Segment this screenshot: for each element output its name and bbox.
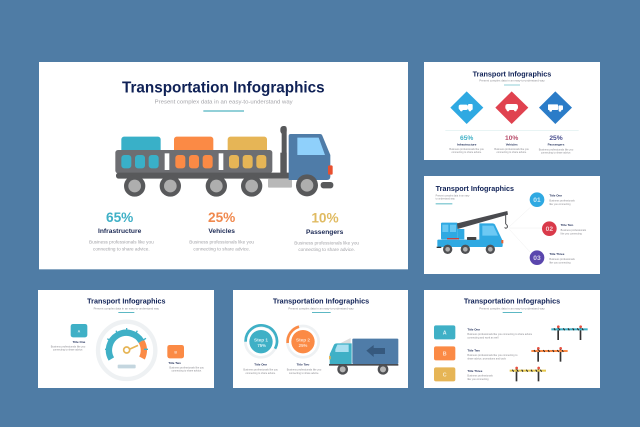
icon: blue diamond mixer truck: [450, 91, 483, 124]
stat labels: Infrastructure: [457, 142, 477, 146]
chart: step 1 ring: [245, 325, 277, 357]
callout: title two: connecting to share advice.: [172, 370, 202, 373]
item A: [434, 325, 533, 339]
stat labels: Business professionals like you: [539, 148, 574, 151]
icon: yellow barrier: [510, 367, 546, 381]
item C: C: [443, 372, 447, 378]
stat: passengers: Passengers: [306, 229, 344, 236]
heading: Transport Infographics: [436, 184, 514, 193]
chart: step 2 ring: [287, 326, 319, 357]
item B: Business professionals like you connecting to: [467, 354, 518, 357]
item C: Title Three: [467, 369, 483, 373]
panel: steps and delivery truck slide: Present complex data in an easy-to-understand way: [288, 307, 355, 310]
stat labels: 10%: [505, 135, 518, 142]
panel: steps and delivery truck slide: [233, 290, 408, 388]
panel: crane truck slide: to understand way: [436, 197, 456, 200]
item 01: Title One: [549, 194, 562, 198]
icon: teal barrier: [551, 325, 588, 340]
item 03: 03: [533, 255, 541, 262]
stat labels: Passengers: [548, 142, 565, 146]
item 01: Business professionals: [549, 200, 575, 203]
item A: Business professionals like you connecting to share advice: [467, 333, 533, 336]
item 02: like you connecting: [561, 232, 582, 235]
callout: title one: [51, 324, 87, 352]
callout: title one: Business professionals like you: [51, 346, 86, 349]
stat: passengers: [294, 211, 359, 252]
icon: delivery truck: [329, 338, 398, 375]
item A: Title One: [467, 327, 480, 331]
stat labels: Business professionals like you: [494, 148, 530, 151]
heading: Transport Infographics: [87, 297, 165, 306]
item C: like you connecting: [467, 378, 489, 381]
stat: passengers: Business professionals like you: [294, 240, 359, 245]
item 03: Business professionals: [549, 258, 575, 261]
item 03: like you connecting: [549, 261, 571, 264]
item labels: Title One: [254, 363, 267, 367]
item labels: connecting to share advice.: [246, 372, 276, 375]
callout: title two: Business professionals like you: [169, 367, 205, 370]
item A: A: [443, 330, 447, 336]
stat: passengers: 10%: [311, 211, 339, 226]
heading: Transportation Infographics: [273, 297, 369, 306]
stat: infrastructure: connecting to share advice.: [93, 246, 150, 251]
item 02: [542, 221, 587, 236]
callout: title one: Title One: [73, 340, 86, 344]
chart: step 2 ring: Step 2: [296, 337, 310, 342]
stat: infrastructure: Business professionals like you: [89, 239, 154, 244]
stat: vehicles: 25%: [208, 210, 235, 225]
item B: share advice, promotions and tools: [467, 357, 507, 360]
item 03: [530, 250, 575, 265]
stat labels: connecting to share advice.: [541, 151, 571, 154]
item B: B: [443, 351, 447, 357]
callout: title two: Title Two: [168, 361, 181, 365]
stat: infrastructure: 65%: [106, 210, 133, 225]
item C: [434, 367, 493, 381]
item labels: Business professionals like you: [243, 369, 279, 372]
callout: title one: A: [78, 329, 81, 333]
main title: Transportation Infographics: [122, 79, 325, 96]
stat labels: connecting to share advice.: [497, 151, 527, 154]
stat: passengers: connecting to share advice.: [298, 247, 355, 252]
stat labels: connecting to share advice.: [452, 151, 482, 154]
heading: Transportation Infographics: [464, 297, 560, 306]
stat: infrastructure: Infrastructure: [98, 228, 142, 235]
callout: title two: [167, 345, 205, 373]
stat labels: [449, 135, 574, 154]
callout: title one: connecting to share advice.: [53, 349, 83, 352]
chart: step 1 ring: Step 1: [254, 337, 268, 342]
item 02: Title Two: [561, 223, 573, 227]
item A: connecting and work as well: [467, 336, 499, 339]
item 01: [530, 192, 575, 207]
heading: Transport Infographics: [473, 70, 551, 79]
stat labels: 65%: [460, 135, 473, 142]
item labels: connecting to share advice.: [289, 372, 319, 375]
stat labels: 25%: [549, 135, 563, 142]
item labels: Title Two: [297, 363, 310, 367]
panel: barriers slide: [424, 290, 600, 388]
item 02: 02: [546, 226, 553, 233]
stat: vehicles: [189, 210, 254, 251]
stat labels: Business professionals like you: [449, 148, 485, 151]
item labels: Business professionals like you: [287, 369, 322, 372]
main subtitle: Present complex data in an easy-to-understand way: [155, 100, 293, 106]
stat: vehicles: Vehicles: [208, 228, 235, 235]
item 02: Business professionals: [561, 229, 587, 232]
stat: vehicles: Business professionals like you: [189, 239, 254, 244]
icon: flatbed truck: [115, 126, 333, 197]
stat: vehicles: connecting to share advice.: [193, 246, 250, 251]
callout: title two: B: [174, 350, 177, 354]
item B: Title Two: [467, 348, 480, 352]
panel: speedometer slide: Present complex data in an easy-to-understand way: [94, 307, 160, 310]
item 03: Title Three: [549, 252, 565, 256]
panel: main truck slide: [39, 62, 408, 269]
item C: Business professionals: [467, 375, 493, 378]
item labels: [243, 363, 322, 375]
panel: barriers slide: Present complex data in an easy-to-understand way: [479, 307, 546, 310]
panel: crane truck slide: [424, 176, 600, 274]
item 01: like you connecting: [549, 203, 571, 206]
icon: speedometer gauge: [98, 322, 155, 379]
panel: speedometer slide: [38, 290, 214, 388]
item B: [434, 346, 518, 360]
item 01: 01: [533, 197, 541, 204]
chart: step 1 ring: 75%: [257, 343, 266, 348]
chart: step 2 ring: 25%: [299, 343, 307, 348]
icon: dark blue diamond lorry: [539, 91, 572, 124]
stat labels: Vehicles: [506, 142, 518, 146]
icon: crane truck: [437, 211, 508, 254]
panel: diamonds slide: [424, 62, 600, 160]
panel: crane truck slide: Present complex data in an easy: [436, 194, 470, 197]
panel: diamonds slide: Present complex data in an easy-to-understand way: [479, 80, 546, 83]
icon: orange barrier: [531, 347, 568, 362]
stat: infrastructure: [89, 210, 154, 251]
icon: red diamond truck: [495, 91, 528, 124]
